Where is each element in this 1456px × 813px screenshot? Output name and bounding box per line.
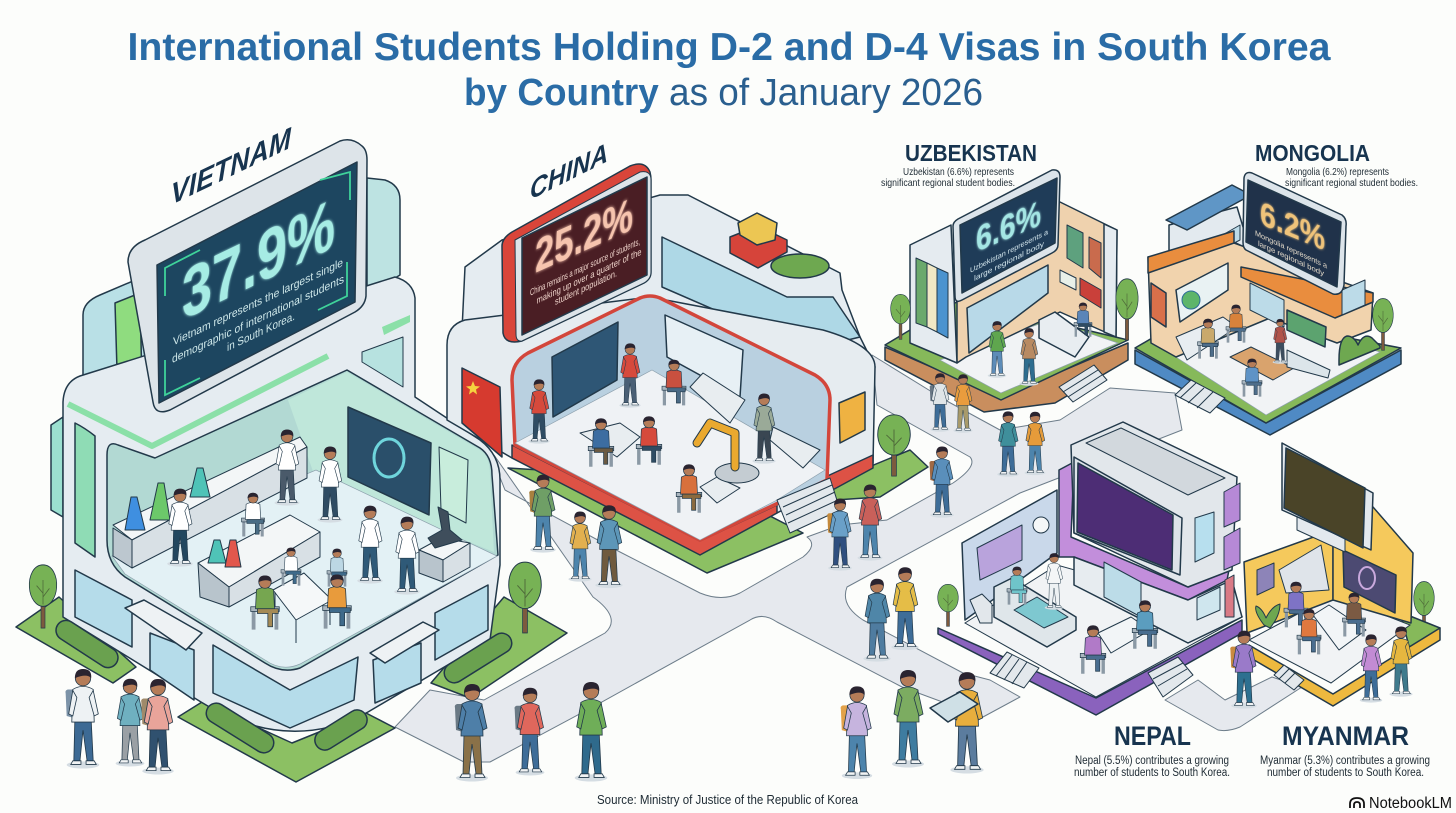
Myanmar stairs [1274, 665, 1304, 690]
deck accent [382, 315, 410, 335]
Nepal stairs right [1148, 657, 1193, 697]
Myanmar screen surface [1284, 448, 1365, 548]
China red base [512, 445, 873, 555]
Nepal side purple tiles [1224, 483, 1240, 570]
Uzbekistan back wall [957, 202, 1117, 363]
grass: Vietnam front [178, 702, 395, 782]
Mongolia desks [1176, 317, 1330, 380]
label: CHINA: CHINA [530, 136, 608, 206]
China stairs [777, 478, 840, 533]
building: Uzbekistan [885, 170, 1138, 412]
building: Myanmar [1244, 443, 1440, 706]
text: Mongolia description [1285, 166, 1418, 189]
lab floor [112, 470, 497, 667]
building: Vietnam [16, 140, 567, 782]
back bench [113, 437, 307, 568]
bottom glazing [75, 570, 488, 728]
Mongolia side sign [1151, 283, 1166, 327]
Mongolia upper window [1205, 225, 1240, 258]
title: International Students Holding D-2 and D-4 Visas in South Korea [128, 26, 1331, 69]
vietnam screen note: Vietnam represents the largest single [173, 255, 343, 349]
Nepal seated students [1080, 600, 1158, 674]
people: model carriers [841, 670, 984, 779]
building: China [447, 164, 928, 573]
trees: Uzbekistan [891, 294, 910, 339]
vietnam percentage: 37.9% [182, 183, 335, 335]
tree left [29, 565, 57, 628]
Nepal purple column [1059, 462, 1229, 600]
text: Nepal description: number of students to South Korea. [1074, 767, 1230, 779]
text: Myanmar description: number of students to South Korea. [1267, 767, 1424, 779]
walkways [395, 355, 1302, 762]
China orange sign [839, 392, 865, 443]
Myanmar platform side [1249, 628, 1440, 706]
China screen surface [522, 177, 647, 335]
Nepal platform side [938, 620, 1242, 715]
china screen note: China remains a major source of students, [530, 237, 640, 299]
vietnam screen note: demographic of international students [172, 272, 344, 366]
Myanmar seated students [1284, 582, 1366, 654]
people: China walkway group [529, 446, 954, 588]
tree right [509, 562, 541, 633]
Uzbekistan floor [940, 320, 1118, 393]
China flag [462, 368, 502, 457]
Nepal floor [965, 565, 1242, 697]
China students [528, 343, 776, 513]
China main display [552, 322, 618, 417]
Nepal left wall [962, 490, 1057, 620]
logo icon [1350, 798, 1364, 808]
Mongolia stairs [1175, 380, 1225, 413]
trees: Mongolia [1373, 299, 1393, 350]
building body [63, 277, 500, 731]
Mongolia floor [1168, 318, 1380, 415]
Mongolia bushes [1339, 336, 1380, 365]
China screen inner bezel [515, 172, 651, 341]
building: Mongolia [1135, 173, 1401, 435]
glass panel left [83, 278, 150, 390]
China lower body [447, 297, 875, 553]
Nepal hospital bed [994, 578, 1076, 647]
screen border [165, 172, 350, 395]
Nepal screen frame [1074, 457, 1182, 575]
Nepal lower window [1197, 587, 1220, 620]
Mongolia screen frame [1243, 173, 1346, 294]
people: lower walkway group [862, 567, 919, 662]
Nepal roof panel [1086, 428, 1225, 495]
china screen note [530, 236, 642, 320]
mid bench [198, 515, 320, 607]
Uzbekistan screen surface [960, 178, 1057, 293]
tree: Nepal [938, 584, 958, 626]
Mongolia globe [1182, 291, 1200, 309]
grass: Vietnam left [16, 597, 136, 683]
Uzbekistan left block [910, 225, 957, 363]
Uzbekistan people [987, 303, 1092, 386]
text: Uzbekistan description: significant regional student bodies. [881, 177, 1015, 189]
China desks [580, 373, 820, 503]
vietnam screen note: in South Korea. [227, 309, 295, 354]
uzbekistan screen note: large regional body [974, 239, 1044, 283]
lab side panel [439, 447, 468, 523]
right bench [419, 538, 470, 582]
text: Nepal description [1074, 755, 1230, 779]
title: by Country as of January 2026 [464, 72, 983, 114]
Nepal patient [1007, 567, 1027, 605]
label: VIETNAM: VIETNAM [171, 121, 292, 212]
deck green strip [68, 356, 328, 446]
Uzbekistan flags [1060, 225, 1101, 308]
NotebookLM logo [1350, 795, 1452, 812]
building: Nepal [938, 422, 1242, 715]
microscope [428, 507, 462, 548]
Uzbekistan screen frame [953, 170, 1060, 301]
people: Vietnam entrance group [65, 669, 174, 775]
left green slat [75, 423, 95, 557]
Uzbekistan side pier [1104, 224, 1117, 337]
Myanmar small poster [1257, 563, 1274, 595]
China roof box [730, 226, 787, 268]
Uzbekistan platform side [885, 343, 1128, 412]
uzbekistan percentage: 6.6% [976, 194, 1041, 261]
Mongolia platform top [1135, 310, 1401, 423]
Mongolia body [1148, 243, 1373, 357]
China interior frame [512, 296, 830, 540]
text: Myanmar description: Myanmar (5.3%) contributes a growing [1260, 755, 1430, 767]
doors [150, 633, 421, 703]
China screen frame [502, 164, 651, 342]
China roof bush [771, 254, 829, 278]
text: Uzbekistan description [881, 166, 1015, 189]
Uzbekistan stripes [916, 258, 948, 338]
entrance canopies [125, 600, 439, 663]
Myanmar display [1343, 550, 1396, 613]
text: Uzbekistan description: Uzbekistan (6.6%) represents [903, 166, 1014, 178]
text: Mongolia description: Mongolia (6.2%) represents [1286, 166, 1389, 178]
Myanmar plant [1256, 604, 1280, 628]
glass panel right [367, 178, 400, 295]
source note: Source: Ministry of Justice of the Republic of Korea [597, 793, 858, 807]
people: upper walkway group [930, 373, 1045, 477]
Uzbekistan desk [1039, 312, 1089, 357]
Myanmar wall board [1279, 545, 1329, 593]
Uzbekistan stairs [1059, 365, 1107, 402]
Nepal clock [1033, 517, 1049, 533]
label: MONGOLIA: MONGOLIA [1255, 140, 1370, 166]
lab students [166, 430, 420, 630]
Nepal nightstand [970, 594, 992, 623]
Uzbekistan glazing [967, 265, 1048, 353]
china screen note: student population. [555, 268, 617, 308]
China upper block [462, 195, 875, 400]
Nepal screen surface [1077, 463, 1173, 570]
grass: Vietnam right [431, 597, 567, 698]
Myanmar left wall [1244, 530, 1333, 633]
green tab [115, 293, 142, 387]
Nepal side panel [1225, 575, 1234, 617]
Nepal stairs left [990, 652, 1039, 688]
lab table [273, 573, 332, 643]
Nepal door [1104, 562, 1141, 617]
mongolia percentage: 6.2% [1260, 194, 1325, 258]
Mongolia solar roof [1166, 185, 1251, 230]
tree: Myanmar [1414, 582, 1434, 633]
label: MYANMAR: MYANMAR [1282, 721, 1409, 751]
big screen frame [128, 140, 367, 412]
text: Nepal description: Nepal (5.5%) contributes a growing [1075, 755, 1229, 767]
tree: China [878, 415, 910, 476]
bushes [52, 617, 516, 757]
China grass right [830, 450, 928, 500]
text: Mongolia description: significant regional student bodies. [1285, 177, 1418, 189]
China grass left [508, 468, 803, 573]
Mongolia platform side [1135, 350, 1401, 435]
Mongolia screen surface [1246, 180, 1341, 287]
Uzbekistan platform top [885, 300, 1128, 400]
Myanmar screen post [1297, 505, 1345, 552]
Myanmar screen frame [1282, 443, 1373, 550]
Nepal window [1195, 512, 1214, 562]
China floor [515, 370, 825, 540]
screen surface [157, 162, 357, 403]
Mongolia upper block [1169, 207, 1250, 275]
Myanmar display ring [1359, 567, 1375, 589]
title [128, 26, 1331, 114]
robot arm [697, 423, 759, 483]
mongolia screen note: large regional body [1258, 239, 1324, 278]
China roof gold block [738, 213, 777, 245]
mongolia screen note: Mongolia represents a [1255, 229, 1328, 271]
Mongolia glass [1250, 280, 1365, 327]
deck window [362, 337, 403, 387]
lab right wall [288, 372, 494, 552]
Nepal table [1098, 617, 1150, 653]
text: Myanmar description [1260, 755, 1430, 779]
Myanmar table [1313, 605, 1366, 650]
Mongolia display [1176, 263, 1228, 322]
logo wordmark: NotebookLM [1369, 795, 1452, 812]
lab flasks [125, 468, 241, 567]
Nepal blanket [1014, 597, 1068, 628]
flag star [466, 381, 480, 394]
Myanmar floor [1249, 595, 1410, 683]
Nepal nurse [1044, 553, 1063, 610]
china percentage: 25.2% [535, 187, 633, 283]
lab display ring [374, 439, 404, 477]
Nepal wall board [977, 525, 1022, 580]
uzbekistan screen note: Uzbekistan represents a [970, 227, 1049, 275]
Mongolia people [1198, 305, 1287, 397]
Nepal lower block [1074, 557, 1242, 643]
label: NEPAL: NEPAL [1114, 721, 1191, 751]
people: centre front group [455, 682, 607, 782]
lab opening [107, 370, 498, 670]
Mongolia orange band [1148, 231, 1373, 318]
Myanmar platform grass [1400, 612, 1440, 650]
lab wall display [348, 407, 431, 515]
Myanmar right wall [1333, 507, 1413, 623]
China whiteboard [665, 315, 743, 397]
tray with model [930, 692, 978, 722]
label: UZBEKISTAN: UZBEKISTAN [905, 140, 1037, 166]
China upper glass [662, 237, 860, 350]
Nepal roof block [1071, 422, 1237, 587]
china screen note: making up over a quarter of the [537, 247, 642, 307]
side teal fin [51, 417, 63, 517]
Mongolia green display [1287, 310, 1326, 347]
people: Myanmar group [1230, 626, 1413, 709]
